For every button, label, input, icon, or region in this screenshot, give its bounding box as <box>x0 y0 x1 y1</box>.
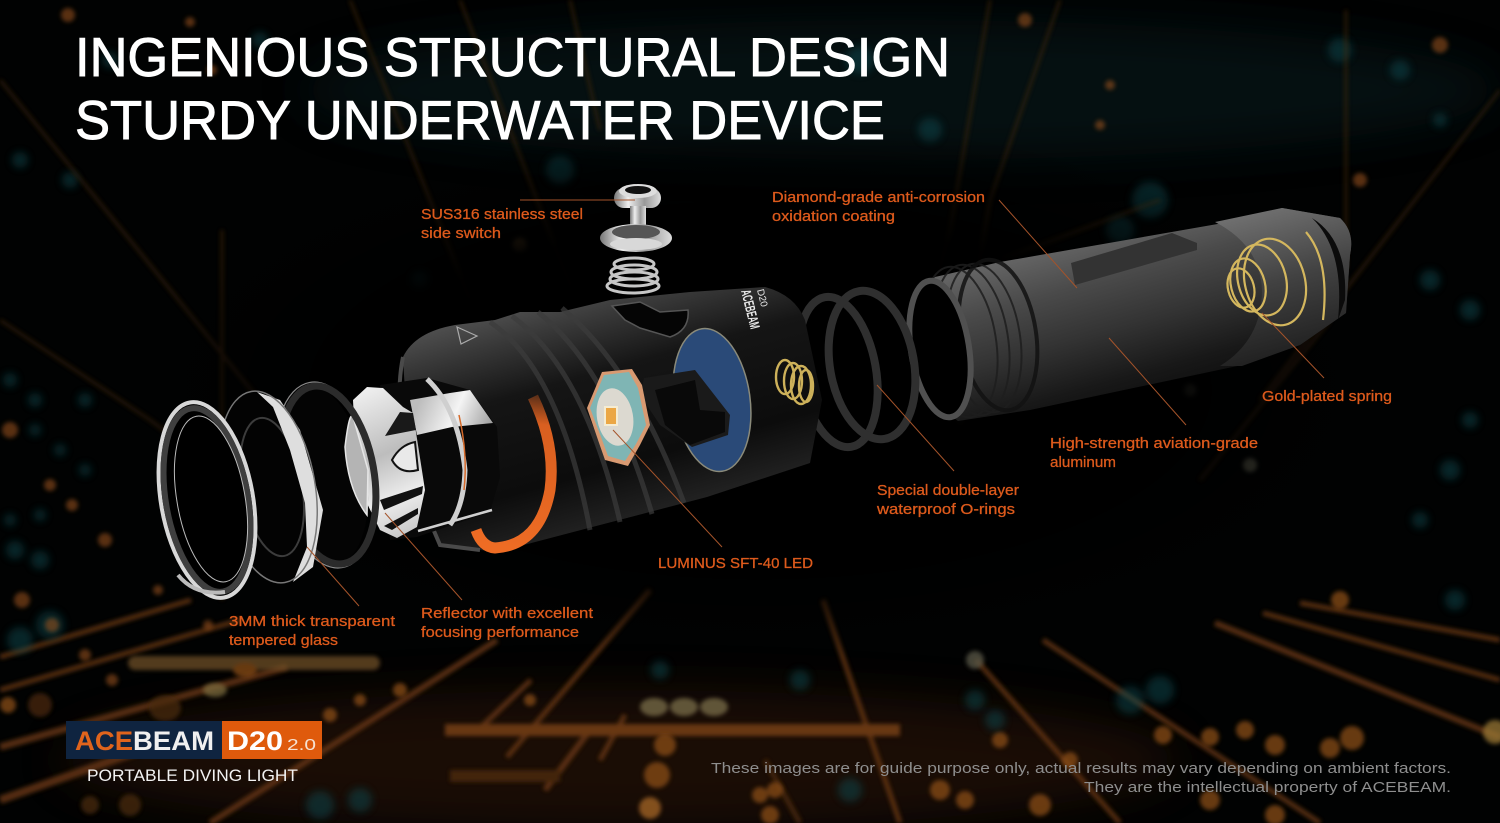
tube body <box>907 208 1351 421</box>
orange ring <box>476 397 551 548</box>
logo navy panel <box>66 721 222 759</box>
callout: O-rings: Special double-layer <box>877 482 1019 499</box>
exploded flashlight: head <box>399 287 822 552</box>
logo tagline: PORTABLE DIVING LIGHT <box>87 766 298 785</box>
reflector cone <box>353 387 425 538</box>
logo brand text: ACEBEAM <box>75 726 214 756</box>
reflector lower lip <box>418 510 492 531</box>
O-ring at front: dark interior <box>263 379 381 571</box>
driver spring <box>776 360 813 404</box>
glass pale inner edge <box>230 413 314 561</box>
title line 1: INGENIOUS STRUCTURAL DESIGN <box>75 26 950 88</box>
switch flange <box>600 224 672 252</box>
disclaimer line 1: These images are for guide purpose only, actual results may vary depending on ambient factors. <box>711 760 1451 777</box>
flat on tube <box>1071 233 1197 285</box>
background: lower orange circuit traces <box>0 590 1500 823</box>
O-ring at front: ring <box>261 374 391 576</box>
engraved brand: D20 <box>754 288 769 309</box>
LED lens <box>592 385 638 449</box>
threads <box>913 254 1047 423</box>
head warning triangle mark <box>457 327 477 344</box>
leader lines <box>307 200 1324 606</box>
LED teal board <box>590 372 646 461</box>
switch spring <box>607 258 659 293</box>
callout: glass: tempered glass <box>229 632 338 649</box>
callout: coating: Diamond-grade anti-corrosion <box>772 189 985 206</box>
switch cap <box>614 188 661 208</box>
reflector cone facets <box>385 412 416 436</box>
callout: reflector: Reflector with excellent <box>421 605 594 622</box>
callout: side switch: SUS316 stainless steel <box>421 206 583 223</box>
callout: O-rings: waterproof O-rings <box>876 501 1015 518</box>
logo <box>66 721 322 785</box>
disclaimer line 2: They are the intellectual property of ACEBEAM. <box>1084 779 1451 796</box>
logo orange panel <box>222 721 322 759</box>
disclaimer <box>711 760 1451 796</box>
LED copper board <box>587 369 650 466</box>
title <box>75 26 950 151</box>
LED chip <box>605 407 617 425</box>
front bezel ring <box>145 395 269 605</box>
callout: aluminum: aluminum <box>1050 454 1116 471</box>
background: upper orange bokeh dots <box>2 8 1448 686</box>
side switch parts <box>600 184 672 293</box>
background: upper orange traces <box>0 0 1500 600</box>
callouts <box>229 189 1392 649</box>
O-rings <box>787 284 926 453</box>
tail gold spring <box>1224 232 1325 332</box>
head body <box>403 287 822 552</box>
side switch hole <box>612 302 688 337</box>
callout: coating: oxidation coating <box>772 208 895 225</box>
reflector <box>353 378 500 540</box>
exploded flashlight: tail tube <box>901 208 1351 423</box>
reflector silver rim <box>427 379 465 525</box>
reflector inner lens <box>345 416 368 515</box>
background: cool haze high in frame <box>300 20 1500 160</box>
head ribs <box>490 308 684 530</box>
tempered glass <box>205 383 331 591</box>
glass bright edge <box>257 392 323 582</box>
callout: LED: LUMINUS SFT-40 LED <box>658 555 813 572</box>
callout: spring: Gold-plated spring <box>1262 388 1392 405</box>
callout: glass: 3MM thick transparent <box>229 613 396 630</box>
tail cap <box>1215 208 1351 366</box>
background: warm haze low in frame <box>60 690 1180 823</box>
logo version text: 2.0 <box>287 737 316 754</box>
reflector orange rim <box>459 415 465 490</box>
tube opening <box>901 276 979 422</box>
reflector silver band <box>410 390 493 435</box>
callout: aluminum: High-strength aviation-grade <box>1050 435 1258 452</box>
blue driver board <box>664 323 760 477</box>
callout: side switch: side switch <box>421 225 501 242</box>
title line 2: STURDY UNDERWATER DEVICE <box>75 89 885 151</box>
logo model text: D20 <box>227 726 283 756</box>
black LED mount <box>640 370 730 447</box>
head inner thread <box>399 357 480 550</box>
reflector housing <box>380 378 500 540</box>
switch stem <box>630 206 646 228</box>
glass disc <box>205 383 331 591</box>
background: lower orange bokeh dots <box>0 591 1500 823</box>
engraved brand <box>738 288 769 331</box>
callout: reflector: focusing performance <box>421 624 579 641</box>
engraved brand: ACEBEAM <box>738 288 763 331</box>
